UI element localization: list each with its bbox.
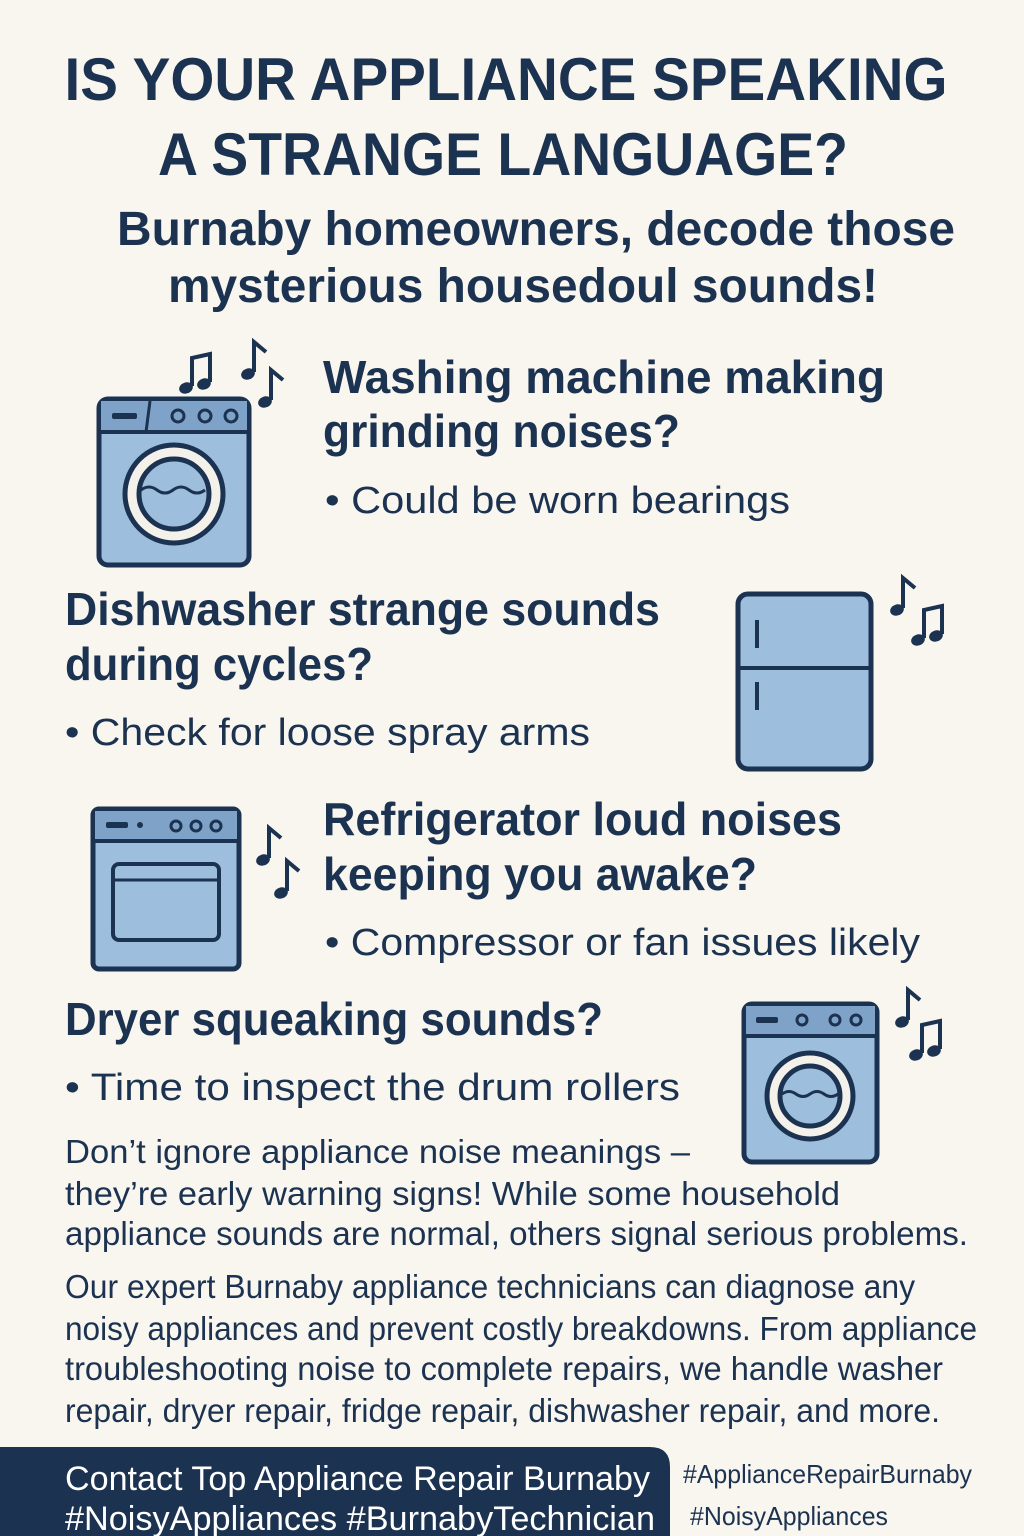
section: dryer: Dryer squeaking sounds?: [65, 993, 603, 1045]
icon: dryer with notes: [744, 990, 942, 1162]
footer: contact banner: [0, 1447, 670, 1536]
text block: warning paragraph: appliance sounds are normal, others signal serious problems.: [65, 1215, 968, 1252]
section: refrigerator: [323, 793, 920, 964]
icon: washing machine with notes: [99, 342, 283, 565]
section: washing machine: [323, 351, 885, 522]
section: washing machine: Washing machine making: [323, 351, 885, 403]
title: A STRANGE LANGUAGE?: [158, 121, 848, 188]
text block: warning paragraph: Don’t ignore appliance noise meanings –: [65, 1133, 691, 1170]
section: dishwasher: during cycles?: [65, 638, 373, 690]
section: washing machine: • Could be worn bearings: [325, 480, 790, 522]
section: dryer: [65, 993, 680, 1109]
subtitle: Burnaby homeowners, decode those: [117, 203, 955, 256]
section: washing machine: grinding noises?: [323, 405, 680, 457]
footer: hashtags: [683, 1459, 972, 1531]
text block: expert paragraph: noisy appliances and prevent costly breakdowns. From appliance: [65, 1310, 977, 1347]
footer: hashtags: #NoisyAppliances: [690, 1501, 888, 1531]
title: [64, 46, 948, 188]
footer: contact banner: Contact Top Appliance Repair Burnaby: [65, 1460, 650, 1498]
text block: expert paragraph: repair, dryer repair, fridge repair, dishwasher repair, and more.: [65, 1392, 940, 1429]
section: refrigerator: • Compressor or fan issues likely: [325, 922, 920, 964]
text block: expert paragraph: Our expert Burnaby appliance technicians can diagnose any: [65, 1268, 915, 1305]
section: dryer: • Time to inspect the drum rollers: [65, 1067, 680, 1109]
section: refrigerator: keeping you awake?: [323, 848, 757, 900]
section: dishwasher: • Check for loose spray arms: [65, 712, 590, 754]
subtitle: [117, 203, 955, 313]
section: refrigerator: Refrigerator loud noises: [323, 793, 842, 845]
title: IS YOUR APPLIANCE SPEAKING: [64, 46, 948, 113]
text block: warning paragraph: [65, 1133, 968, 1252]
text block: expert paragraph: troubleshooting noise to complete repairs, we handle washer: [65, 1350, 943, 1387]
icon: oven with notes: [93, 809, 299, 969]
section: dishwasher: Dishwasher strange sounds: [65, 583, 660, 635]
text block: warning paragraph: they’re early warning signs! While some household: [65, 1175, 840, 1212]
subtitle: mysterious housedoul sounds!: [168, 260, 878, 313]
section: dishwasher: [65, 583, 660, 754]
text block: expert paragraph: [65, 1268, 977, 1429]
footer: hashtags: #ApplianceRepairBurnaby: [683, 1459, 972, 1489]
icon: fridge with notes: [738, 578, 944, 769]
